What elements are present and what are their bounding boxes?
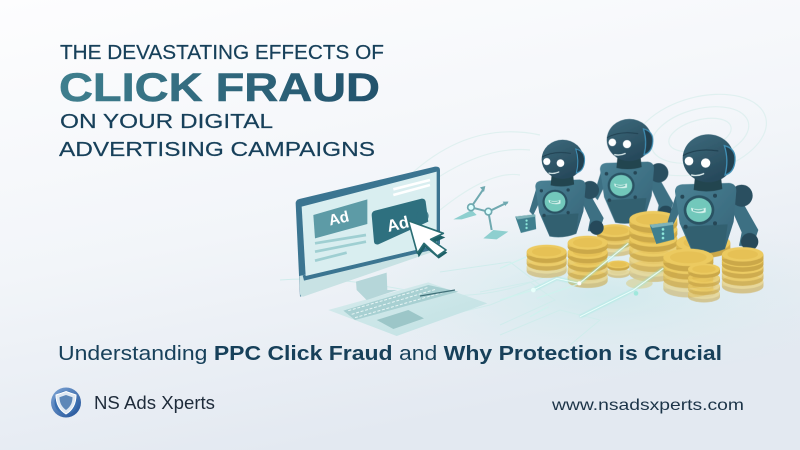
background glow bbox=[340, 210, 800, 380]
trackpad bbox=[377, 310, 424, 329]
coin stack: front left bbox=[568, 236, 608, 288]
ad text lines bbox=[315, 235, 366, 261]
title line 1: THE DEVASTATING EFFECTS OF bbox=[60, 42, 384, 64]
ad card 1 bbox=[313, 199, 367, 238]
coin stack: front right wide bbox=[663, 249, 713, 297]
robot: right bbox=[650, 134, 758, 253]
coin stack: back left bbox=[527, 245, 567, 278]
ad card 2: Ad bbox=[385, 212, 411, 236]
monitor lower bezel bbox=[299, 244, 440, 297]
coin stack: behind right robot bbox=[676, 233, 730, 258]
logo: shield icon bbox=[51, 388, 81, 418]
illustration: computer with ads bbox=[296, 167, 487, 336]
title line 3: ON YOUR DIGITAL bbox=[60, 111, 273, 133]
screen text lines bbox=[393, 180, 430, 195]
cursor arrow bbox=[408, 221, 447, 259]
robot: middle bbox=[594, 119, 673, 224]
monitor screen bbox=[302, 172, 437, 276]
computer base bbox=[328, 282, 487, 336]
logo name: NS Ads Xperts bbox=[94, 393, 215, 413]
coin stack: back middle bbox=[597, 224, 633, 256]
title emphasis: click fraud: CLICK FRAUD bbox=[59, 66, 380, 110]
coin stack: center tall bbox=[629, 211, 677, 282]
circuit lines bbox=[280, 262, 600, 345]
illustration: robots and coins bbox=[500, 119, 763, 317]
glowing growth lines bbox=[500, 243, 663, 317]
coin stack: front right far bbox=[722, 247, 763, 293]
title line 4: ADVERTISING CAMPAIGNS bbox=[59, 139, 375, 161]
keyboard bbox=[343, 285, 458, 320]
title bbox=[59, 42, 384, 161]
decorative swirl lines bbox=[410, 81, 776, 210]
subtitle: Understanding PPC Click Fraud and Why Protection is Crucial bbox=[58, 343, 722, 365]
ad card 1: Ad bbox=[327, 208, 351, 230]
flat translucent coin bbox=[626, 278, 653, 289]
coin stack: small bbox=[607, 260, 630, 278]
website url: www.nsadsxperts.com bbox=[551, 397, 744, 414]
icon: network arrows bbox=[453, 186, 509, 239]
monitor stand bbox=[356, 273, 397, 300]
coin stack: front narrow bbox=[688, 263, 720, 302]
monitor frame bbox=[296, 167, 440, 297]
robot: left bbox=[515, 140, 604, 237]
ad card 2 bbox=[372, 199, 429, 244]
keyboard keys bbox=[348, 287, 447, 318]
